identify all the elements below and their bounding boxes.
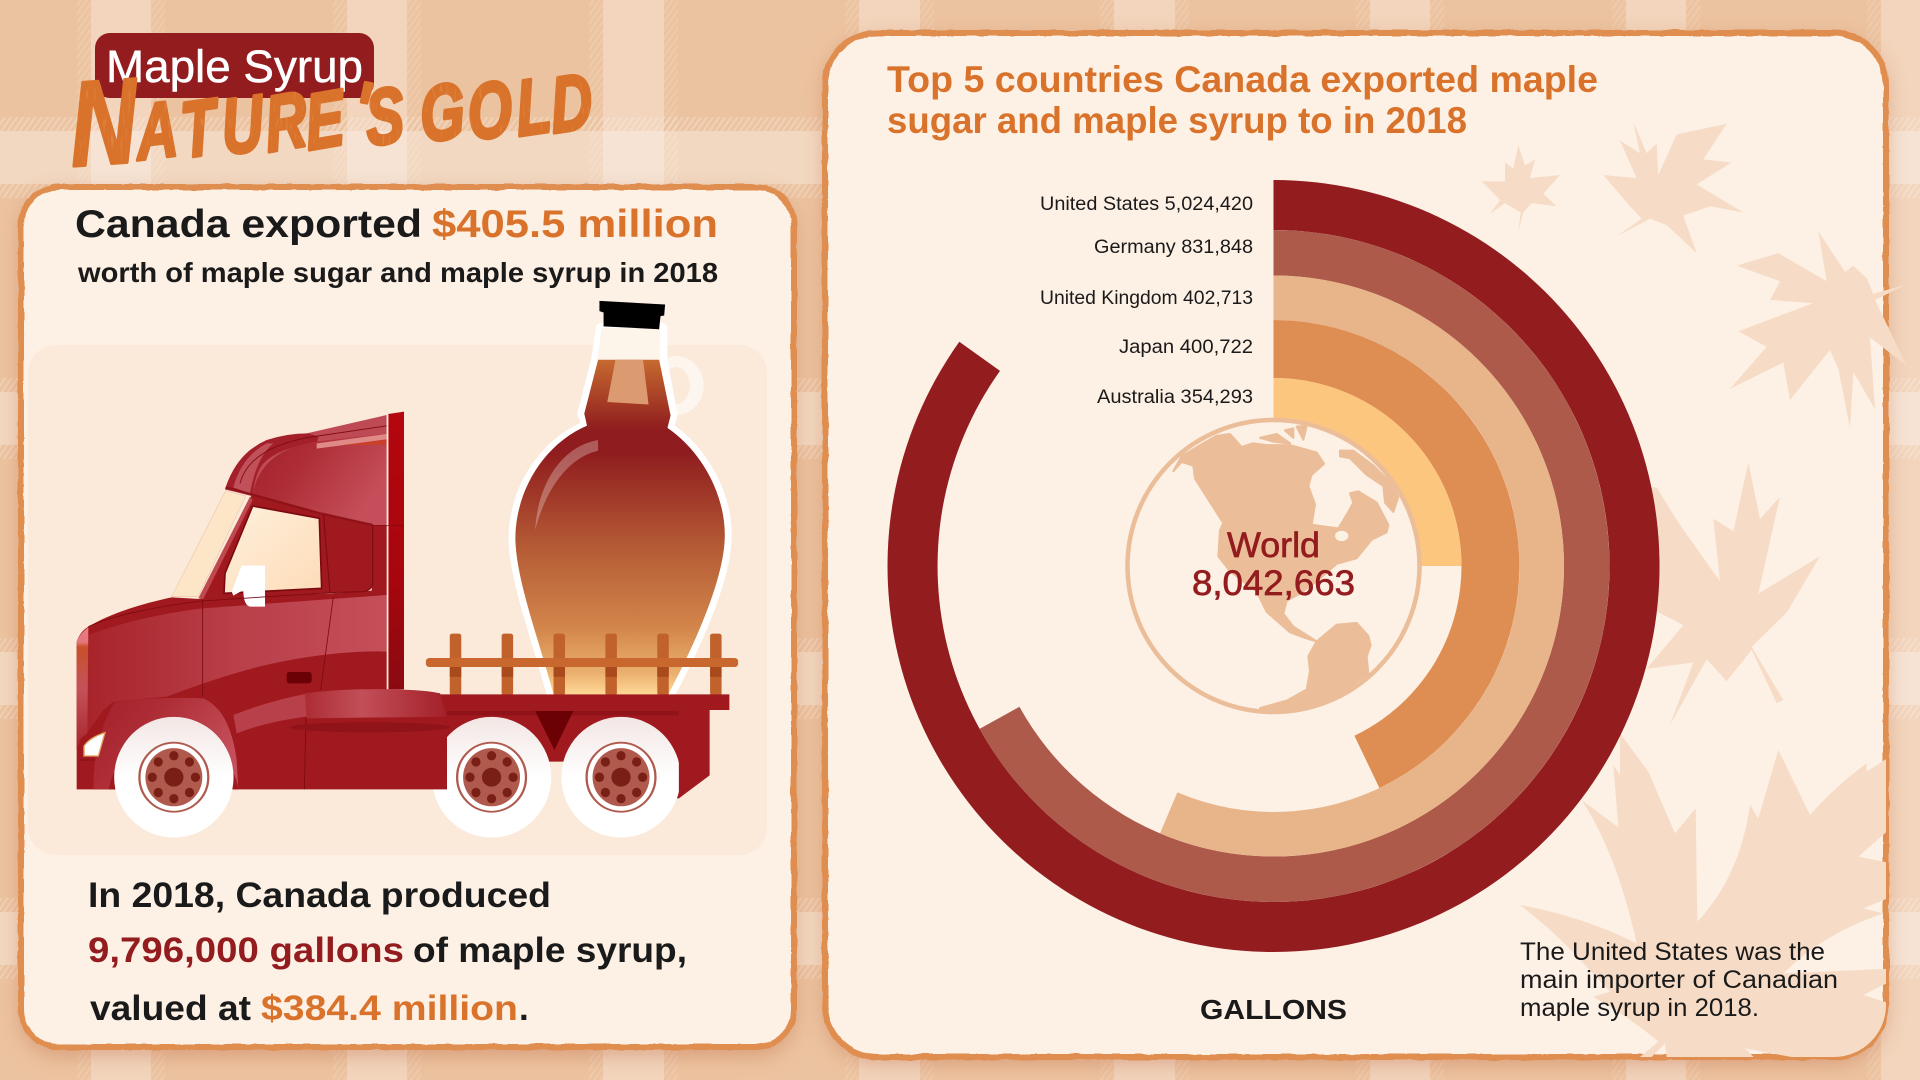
country labels: Germany 831,848 — [1094, 237, 1253, 258]
door lines and handle — [80, 593, 333, 789]
icon: maple leaf upper — [1603, 122, 1743, 253]
title: Nature's Gold brush lettering: ATURE'S GOLD — [132, 56, 595, 177]
icon: small maple leaf — [1482, 145, 1560, 231]
cab base — [77, 525, 447, 789]
icon: maple leaf large — [1520, 733, 1900, 1070]
grille — [77, 627, 88, 750]
exports headline: worth of maple sugar and maple syrup in 2018 — [77, 257, 718, 288]
axis label: gallons: GALLONS — [1200, 994, 1347, 1025]
hood and door panels — [87, 595, 387, 733]
production text — [88, 876, 687, 1028]
radial bar chart — [888, 180, 1660, 952]
exports headline: Canada exported — [75, 203, 422, 246]
rear wheels — [432, 711, 681, 838]
chart heading: Top 5 countries Canada exported maple — [887, 59, 1598, 100]
exports headline — [75, 203, 718, 288]
truck cab — [77, 412, 450, 789]
illustration: truck carrying syrup jug — [77, 301, 738, 838]
production text: of maple syrup, — [413, 931, 687, 970]
side skirts — [233, 689, 450, 733]
trailer section with jug — [418, 301, 738, 838]
icon: globe — [1128, 420, 1420, 712]
exports headline: $405.5 million — [432, 203, 718, 246]
icon: maple leaf middle — [1647, 462, 1820, 725]
country labels — [1040, 194, 1253, 408]
bar: United Kingdom — [1160, 276, 1564, 856]
truck flatbed — [418, 694, 729, 798]
production text: In 2018, Canada produced — [88, 876, 551, 915]
chart heading: sugar and maple syrup to in 2018 — [887, 100, 1467, 141]
note: main importer — [1520, 938, 1838, 1022]
bar: Germany — [980, 230, 1609, 902]
country labels: Australia 354,293 — [1097, 387, 1253, 408]
chart heading — [887, 59, 1598, 141]
world total: 8,042,663 — [1192, 564, 1355, 603]
fairing — [225, 415, 404, 525]
icon: maple leaf right — [1730, 231, 1907, 428]
world total: World — [1227, 526, 1320, 565]
production text: 9,796,000 gallons — [88, 931, 404, 970]
note: main importer: maple syrup in 2018. — [1520, 994, 1759, 1022]
country labels: United States 5,024,420 — [1040, 194, 1253, 215]
production text: valued at — [90, 989, 251, 1028]
bar: Australia — [1274, 378, 1462, 566]
fence rail — [426, 634, 738, 695]
production text: $384.4 million — [261, 989, 518, 1028]
country labels: Japan 400,722 — [1119, 337, 1253, 358]
windshield — [172, 491, 246, 597]
mirror — [232, 566, 265, 607]
note: main importer: main importer of Canadian — [1520, 966, 1838, 994]
production text: . — [519, 989, 529, 1028]
icon: syrup jug — [515, 301, 725, 694]
panel: right export chart — [825, 33, 1886, 1063]
world total — [1192, 526, 1355, 603]
front fender — [93, 698, 239, 789]
door window — [198, 487, 373, 600]
country labels: United Kingdom 402,713 — [1040, 288, 1253, 309]
note: main importer: The United States was the — [1520, 938, 1825, 966]
rear cab strip — [373, 412, 404, 689]
bar: Japan — [1274, 320, 1519, 788]
bar: United States — [888, 180, 1660, 952]
panel: left exports and production — [21, 187, 794, 1055]
headlight — [84, 733, 105, 756]
title: Nature's Gold brush lettering: N — [68, 53, 141, 192]
illustration backdrop — [28, 345, 767, 855]
decorative maple leaves — [1482, 122, 1907, 1070]
title badge: Maple Syrup: Maple Syrup — [106, 41, 363, 92]
front wheel — [114, 717, 234, 838]
